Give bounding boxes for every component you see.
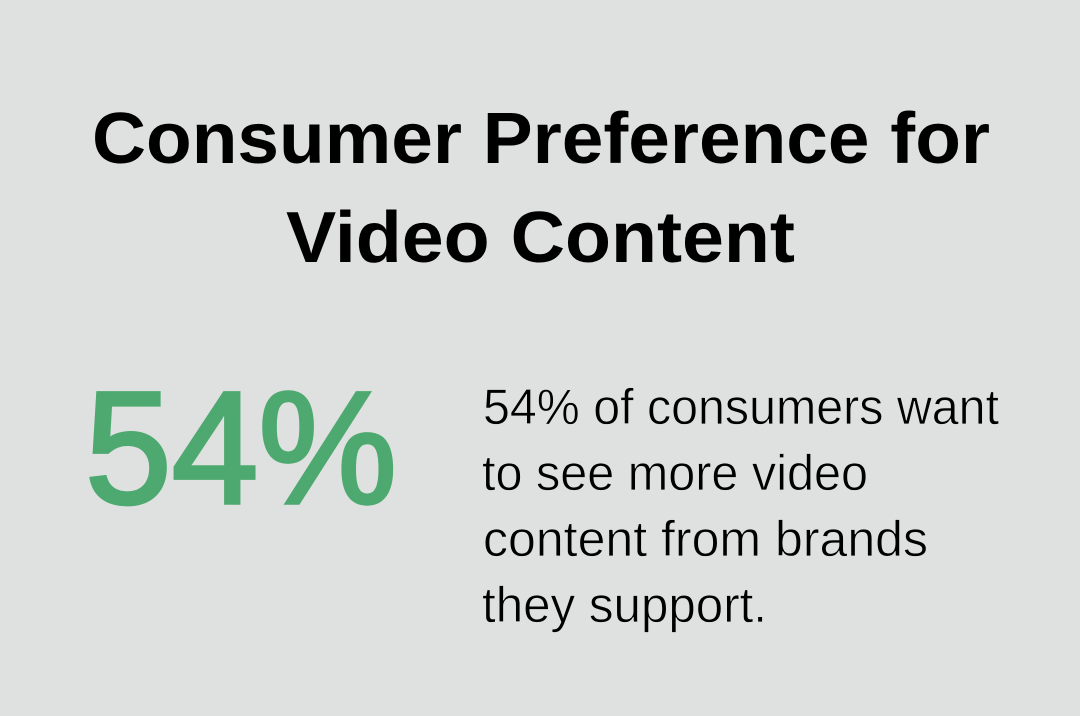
description text: to see more video [482,445,868,501]
big statistic: 54%: 54% [85,358,397,537]
description text [482,379,999,633]
description text: they support. [482,577,767,633]
title: Consumer Preference for [92,99,990,179]
description text: content from brands [483,511,928,567]
title [92,99,990,278]
title: Video Content [286,198,795,278]
description text: 54% of consumers want [483,379,999,435]
